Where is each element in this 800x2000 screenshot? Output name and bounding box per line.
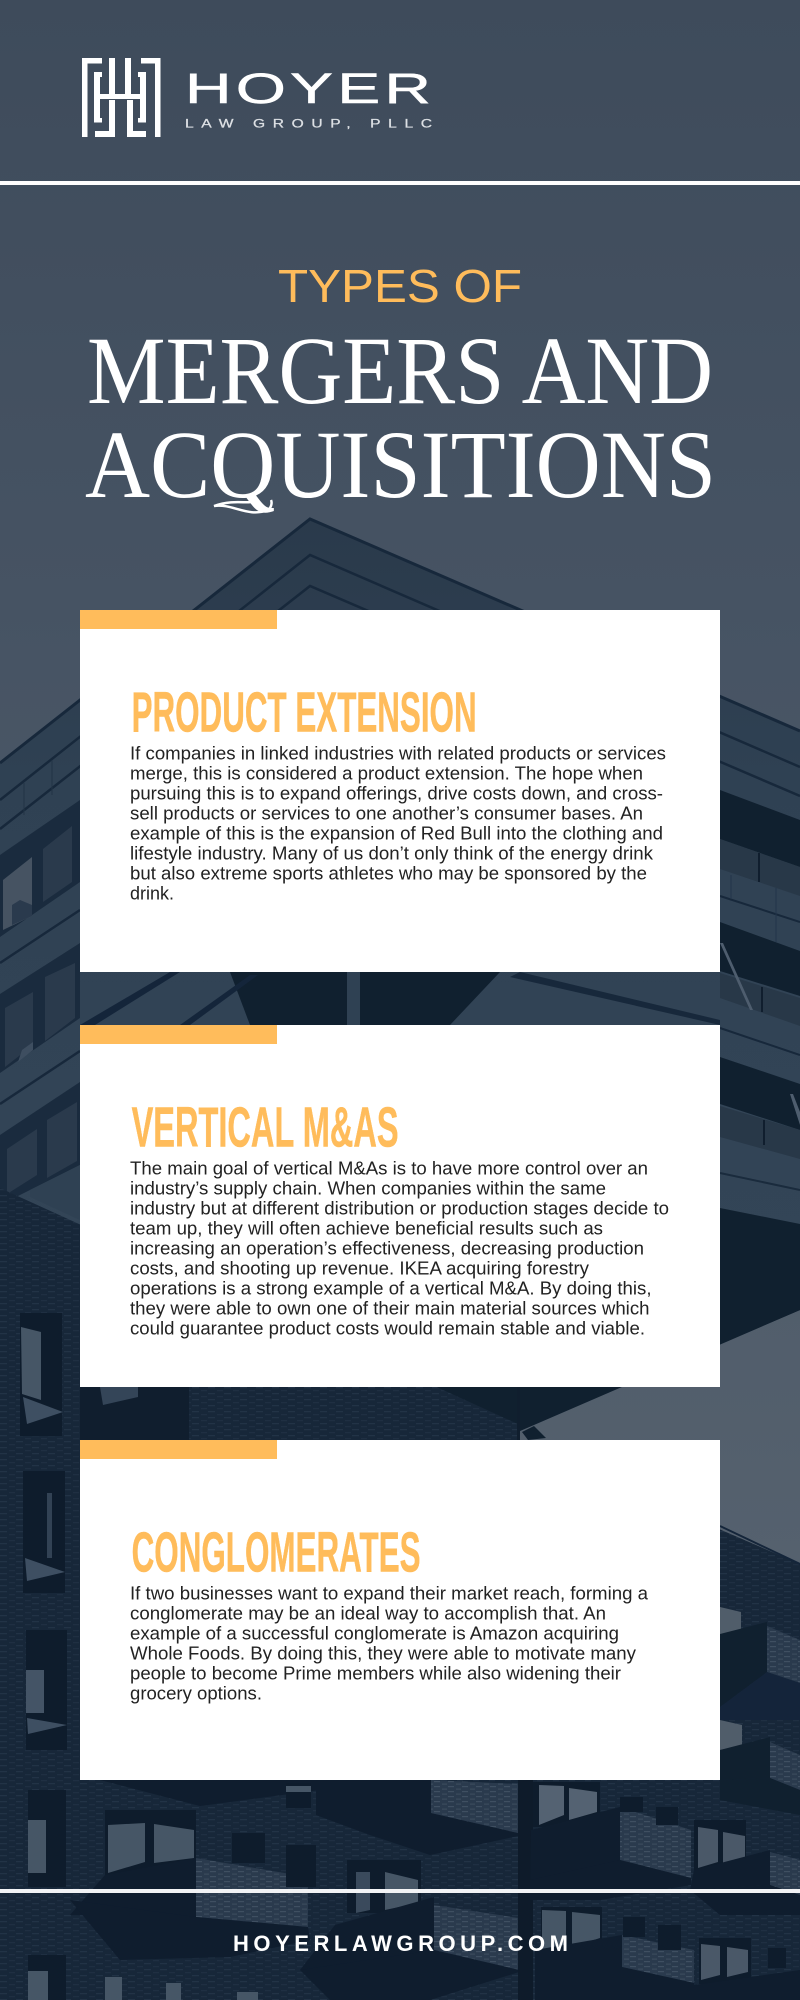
logo tagline: LAW GROUP, PLLC xyxy=(185,116,432,130)
body text: vertical M&As: increasing an operation’s effectiveness, decreasing production xyxy=(130,1238,644,1258)
body text: conglomerates: people to become Prime members while also widening their xyxy=(130,1663,621,1683)
body text: product extension: example of this is the expansion of Red Bull into the clothing and xyxy=(130,823,663,843)
logo xyxy=(82,58,432,137)
body text: product extension: lifestyle industry. Many of us don’t only think of the energy drink xyxy=(130,843,654,863)
body text: vertical M&As: could guarantee product costs would remain stable and viable. xyxy=(130,1318,645,1338)
body text: product extension: sell products or services to one another’s consumer bases. An xyxy=(130,803,643,823)
body text: product extension: merge, this is considered a product extension. The hope when xyxy=(130,763,643,783)
body text: conglomerates: Whole Foods. By doing this, they were able to motivate many xyxy=(130,1643,636,1663)
body text: vertical M&As xyxy=(130,1158,669,1338)
logo wordmark: HOYER xyxy=(185,64,431,112)
left window rows xyxy=(0,800,80,937)
bottom balconies and windows xyxy=(70,1780,800,2000)
body text: conglomerates: If two businesses want to expand their market reach, forming a xyxy=(130,1583,649,1603)
body text: product extension: drink. xyxy=(130,883,174,903)
brick wall xyxy=(0,1188,800,2000)
body text: conglomerates: example of a successful conglomerate is Amazon acquiring xyxy=(130,1623,619,1643)
gap between first and second panels xyxy=(230,972,500,1025)
body text: conglomerates: grocery options. xyxy=(130,1683,262,1703)
header rule xyxy=(0,181,800,185)
body text: product extension: If companies in linked industries with related products or services xyxy=(130,743,666,763)
panel: product extension xyxy=(80,610,720,972)
body text: product extension xyxy=(130,743,666,903)
body text: vertical M&As: industry but at different distribution or production stages decide to xyxy=(130,1198,669,1218)
title eyebrow: TYPES OF xyxy=(278,260,522,312)
left windows xyxy=(20,1313,67,2000)
heading: vertical M&As: VERTICAL M&AS xyxy=(132,1096,399,1160)
footer rule xyxy=(0,1889,800,1893)
body text: vertical M&As: costs, and shooting up revenue. IKEA acquiring forestry xyxy=(130,1258,589,1278)
body text: vertical M&As: industry’s supply chain. When companies within the same xyxy=(130,1178,606,1198)
body text: vertical M&As: The main goal of vertical M&As is to have more control over an xyxy=(130,1158,648,1178)
panel: vertical M&As xyxy=(80,1025,720,1387)
body text: vertical M&As: team up, they will often achieve beneficial results such as xyxy=(130,1218,603,1238)
body text: product extension: but also extreme sports athletes who may be sponsored by the xyxy=(130,863,647,883)
body text: product extension: pursuing this is to expand offerings, drive costs down, and cross- xyxy=(130,783,663,803)
right balconies xyxy=(720,1607,800,1815)
title xyxy=(85,317,716,518)
body text: vertical M&As: operations is a strong example of a vertical M&A. By doing this, xyxy=(130,1278,652,1298)
heading: product extension: PRODUCT EXTENSION xyxy=(132,681,477,745)
footer website: HOYERLAWGROUP.COM xyxy=(233,1931,568,1956)
title: ACQUISITIONS xyxy=(85,411,716,518)
dark soffit above the sky xyxy=(400,1224,800,1431)
body text: conglomerates: conglomerate may be an ideal way to accomplish that. An xyxy=(130,1603,606,1623)
right floor bands xyxy=(720,790,800,867)
heading: conglomerates: CONGLOMERATES xyxy=(132,1521,421,1585)
title: MERGERS AND xyxy=(87,317,713,424)
icon: law group monogram xyxy=(82,58,160,137)
body text: vertical M&As: they were able to own one of their main material sources which xyxy=(130,1298,650,1318)
body text: conglomerates xyxy=(130,1583,649,1703)
panel: conglomerates xyxy=(80,1440,720,1780)
